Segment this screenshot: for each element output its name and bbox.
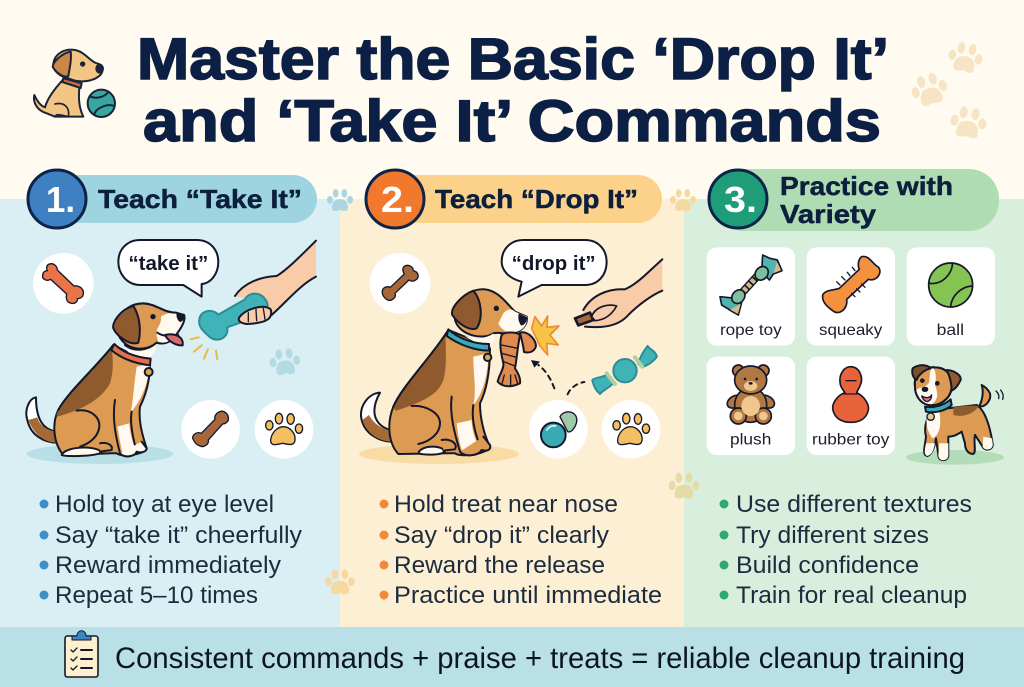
- speech bubble: drop it: [502, 240, 607, 297]
- heading: step 2: [366, 170, 662, 228]
- panel: teach drop it: [340, 199, 684, 627]
- bullet list: drop it: Reward the release: [394, 552, 605, 579]
- speech bubble: take it: “take it”: [128, 252, 208, 275]
- heading: step 2: 2.: [381, 179, 414, 220]
- icon: puppy with ball: [34, 50, 115, 117]
- bullet list: take it: Hold toy at eye level: [55, 491, 274, 518]
- icon: dog holding rope: [359, 289, 536, 464]
- bullet list: drop it: Hold treat near nose: [394, 491, 618, 518]
- icon: starburst: [532, 316, 559, 355]
- arrowhead: [531, 360, 540, 368]
- icon: paw badge: [602, 400, 660, 459]
- footer banner: [0, 627, 1024, 687]
- bullet list: variety: Build confidence: [736, 552, 919, 579]
- heading: step 3: Practice with: [780, 171, 953, 201]
- heading: step 3: 3.: [724, 179, 757, 220]
- card: ball: ball: [937, 322, 964, 339]
- card: squeaky: squeaky: [819, 322, 882, 339]
- heading: step 2: Teach “Drop It”: [435, 184, 638, 214]
- card: plush: [707, 357, 795, 455]
- heading: step 3: Variety: [780, 199, 877, 229]
- title: Master the Basic ‘Drop It’: [137, 27, 889, 92]
- icon: hand offering treat: [575, 259, 662, 327]
- decorative paw group top right: [908, 40, 988, 140]
- speech bubble: take it: [118, 240, 218, 297]
- bullet list: take it: Repeat 5–10 times: [55, 582, 258, 609]
- illustration: drop it scene: [359, 240, 662, 464]
- card: rope toy: rope toy: [720, 322, 782, 339]
- footer banner: Consistent commands + praise + treats = reliable cleanup training: [115, 642, 965, 675]
- toy grid: [707, 247, 1004, 465]
- bullet list: variety: Try different sizes: [736, 522, 929, 549]
- heading: step 3: [709, 169, 999, 231]
- icon: happy standing dog: [906, 365, 1004, 465]
- title: and ‘Take It’ Commands: [143, 89, 881, 154]
- icon: paw badge: [255, 400, 313, 459]
- bullet list: take it: Say “take it” cheerfully: [55, 522, 303, 549]
- bullet list: take it: Reward immediately: [55, 552, 282, 579]
- icon: teal candy toy: [592, 346, 657, 394]
- arrows: dashed paths to dog: [538, 365, 584, 394]
- icon: clipboard checklist: [65, 631, 98, 677]
- bullet list: drop it: Practice until immediate: [394, 582, 662, 609]
- panel: practice with variety: [684, 199, 1024, 627]
- bullet list: drop it: Say “drop it” clearly: [394, 522, 610, 549]
- card: plush: plush: [730, 431, 771, 448]
- icon: ball toy badge: [529, 400, 588, 459]
- illustration: take it scene: [26, 240, 316, 464]
- heading: step 1: Teach “Take It”: [98, 184, 302, 214]
- panel: teach take it: [0, 199, 340, 627]
- decorative small paws: [268, 189, 699, 594]
- card: squeaky: [807, 247, 895, 346]
- bullet list: variety: Train for real cleanup: [736, 582, 967, 609]
- icon: orange bone badge: [33, 253, 94, 314]
- sparkle marks: [191, 337, 217, 359]
- bullet list: variety: Use different textures: [736, 491, 972, 518]
- speech bubble: drop it: “drop it”: [512, 252, 596, 275]
- heading: step 1: 1.: [46, 179, 75, 220]
- bullet list: take it: [40, 491, 303, 609]
- heading: step 1: [28, 170, 317, 228]
- title: [137, 27, 889, 154]
- card: rope toy: [707, 247, 795, 346]
- bullet list: variety: [720, 491, 972, 609]
- card: ball: [907, 247, 995, 346]
- icon: biscuit badge: [181, 400, 240, 459]
- bullet list: drop it: [380, 491, 662, 609]
- card: rubber toy: rubber toy: [812, 431, 889, 448]
- card: rubber toy: [807, 357, 895, 455]
- icon: hand holding teal bone: [199, 241, 316, 340]
- icon: dog sitting: [26, 303, 184, 464]
- icon: biscuit badge: [370, 253, 430, 314]
